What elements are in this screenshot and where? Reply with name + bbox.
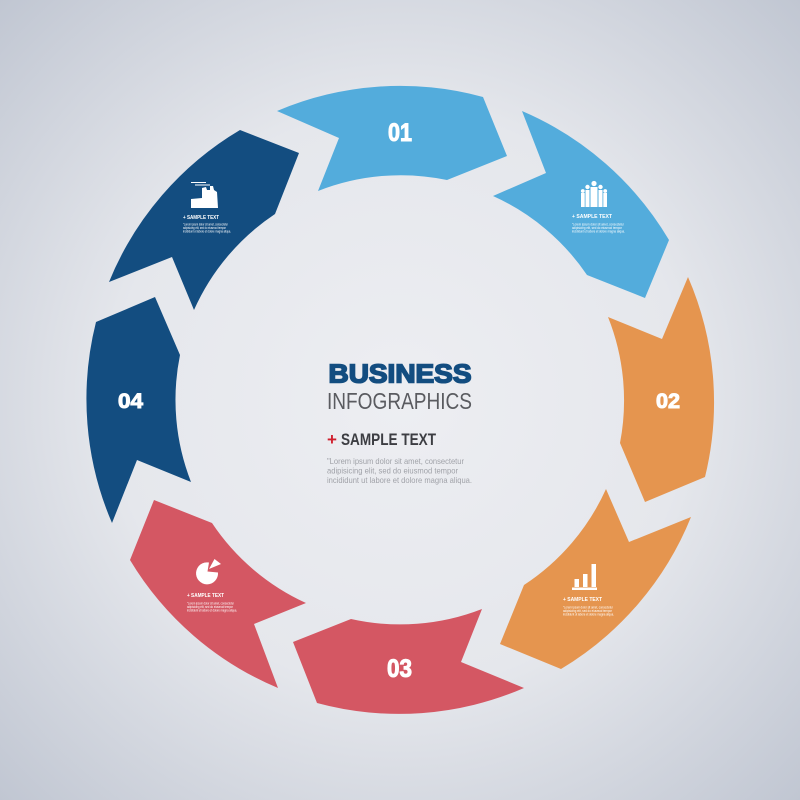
- sample text block: adipisicing elit, sed do eiusmod tempor: [183, 226, 227, 230]
- segment: red arrow with pie icon: [130, 500, 306, 688]
- body text: "Lorem ipsum dolor sit amet, consectetur: [327, 456, 464, 466]
- segment: light blue arrow with people icon: [493, 111, 669, 298]
- sample text block: adipisicing elit, sed do eiusmod tempor: [563, 609, 613, 613]
- segment 01: light blue arrow: [277, 86, 507, 191]
- sample text block: [572, 214, 625, 234]
- sample text block: "Lorem ipsum dolor sit amet, consectetur: [563, 606, 614, 610]
- number 01: 01: [388, 119, 412, 147]
- sample text block: adipisicing elit, sed do eiusmod tempor: [187, 605, 234, 609]
- number 03: 03: [387, 655, 412, 683]
- segment 03: red arrow: [293, 609, 524, 714]
- body text: adipisicing elit, sed do eiusmod tempor: [327, 466, 458, 476]
- sample text block: + SAMPLE TEXT: [187, 593, 225, 599]
- segment 02: orange arrow: [608, 277, 714, 502]
- red plus sign: +: [327, 430, 337, 449]
- center title block: [327, 358, 472, 485]
- heading: BUSINESS: BUSINESS: [328, 358, 472, 388]
- icon: factory: [191, 182, 218, 208]
- sample text block: + SAMPLE TEXT: [563, 597, 603, 603]
- number 04: 04: [118, 390, 143, 413]
- sample text block: adipisicing elit, sed do eiusmod tempor: [572, 226, 623, 230]
- sample text block: [183, 215, 231, 234]
- segment 04: navy arrow: [86, 297, 191, 523]
- segment: navy arrow with factory icon: [109, 130, 299, 310]
- sample text block: incididunt ut labore et dolore magna aliqua.: [187, 608, 237, 612]
- sample text block: "Lorem ipsum dolor sit amet, consectetur: [187, 602, 235, 606]
- sample text block: incididunt ut labore et dolore magna aliqua.: [572, 230, 625, 234]
- icon: pie chart: [196, 559, 221, 584]
- icon: people group: [581, 181, 607, 207]
- icon: bar chart: [572, 564, 597, 590]
- subheading: SAMPLE TEXT: SAMPLE TEXT: [341, 431, 436, 449]
- sample text block: [187, 593, 237, 612]
- sample text block: "Lorem ipsum dolor sit amet, consectetur: [572, 222, 625, 226]
- body text: [327, 456, 472, 485]
- number 02: 02: [656, 390, 680, 413]
- body text: incididunt ut labore et dolore magna aliqua.: [327, 475, 472, 485]
- segment: orange arrow with bar chart icon: [500, 489, 691, 669]
- sample text block: + SAMPLE TEXT: [183, 215, 220, 221]
- sample text block: [563, 597, 614, 616]
- sample text block: + SAMPLE TEXT: [572, 214, 613, 220]
- sample text block: "Lorem ipsum dolor sit amet, consectetur: [183, 222, 229, 226]
- heading: INFOGRAPHICS: INFOGRAPHICS: [327, 388, 472, 414]
- sample text block: incididunt ut labore et dolore magna aliqua.: [183, 230, 231, 234]
- sample text block: incididunt ut labore et dolore magna aliqua.: [563, 612, 614, 616]
